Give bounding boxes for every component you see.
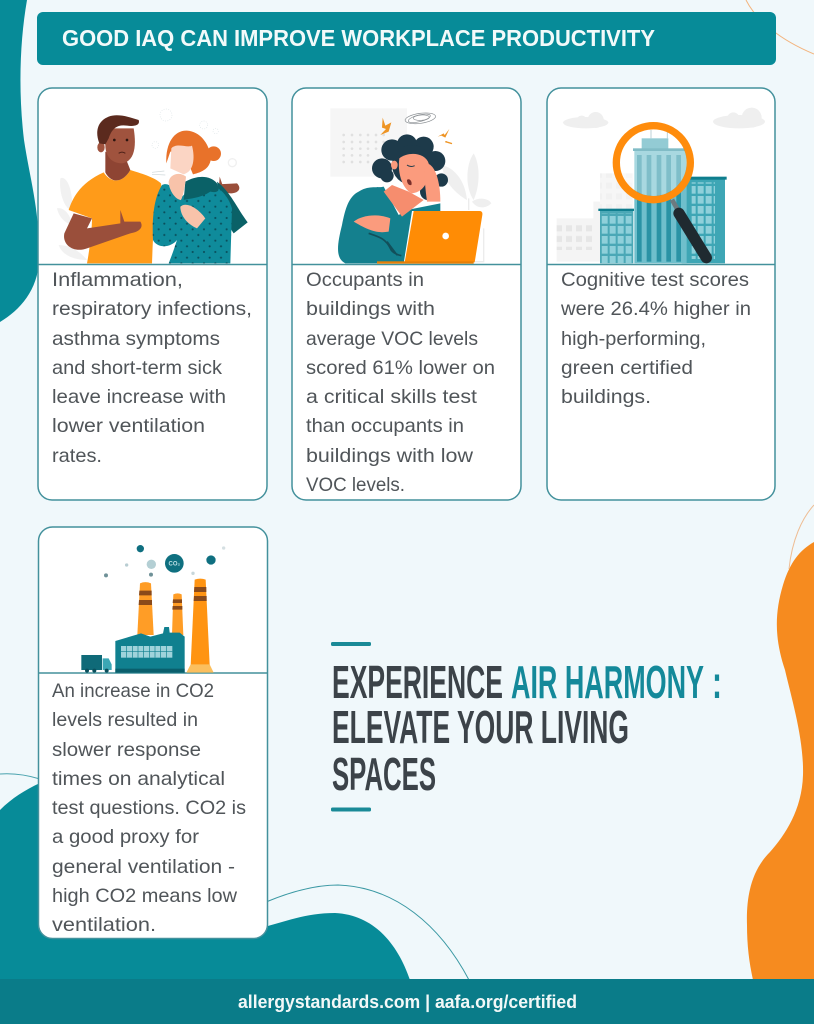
panel: VOC levels (292, 88, 521, 500)
panel: green certified buildings (547, 88, 775, 500)
text: CO2 levels: slower response (52, 739, 201, 761)
background arc: bottom left small (0, 774, 40, 779)
title banner (37, 12, 776, 65)
background blob: top left teal (0, 0, 39, 322)
text: inflammation: Inflammation, (52, 269, 183, 291)
text: VOC levels: buildings with low (306, 445, 474, 467)
icon: magnifier over buildings (557, 108, 765, 263)
text: CO2 levels: An increase in CO2 (52, 680, 214, 702)
background arc: bottom centre (266, 885, 469, 980)
text: VOC levels (306, 269, 495, 496)
icon: man comforting coughing woman (57, 109, 248, 263)
heading: experience air harmony (331, 642, 722, 812)
text: cognitive scores: green certified (561, 357, 693, 379)
heading: experience air harmony: : (712, 656, 722, 708)
text: VOC levels: VOC levels. (306, 474, 405, 496)
text: VOC levels: scored 61% lower on (306, 357, 495, 379)
text: inflammation: rates. (52, 445, 102, 467)
text: VOC levels: Occupants in (306, 269, 424, 291)
text: cognitive scores: were 26.4% higher in (560, 298, 751, 320)
icon: stressed woman at laptop (330, 108, 491, 264)
footer: allergystandards.com | aafa.org/certified (238, 992, 577, 1012)
text: CO2 levels: levels resulted in (52, 709, 198, 731)
panel: CO2 levels (38, 527, 268, 938)
text: inflammation (52, 269, 252, 467)
text: VOC levels: buildings with (306, 298, 435, 320)
title banner: GOOD IAQ CAN IMPROVE WORKPLACE PRODUCTIVITY (62, 25, 655, 51)
text: inflammation: respiratory infections, (52, 298, 252, 320)
background arc: right orange (789, 505, 814, 569)
background arc: top right orange (746, 0, 814, 54)
heading: experience air harmony: EXPERIENCE (332, 656, 503, 708)
text: CO2 levels: test questions. CO2 is (52, 797, 246, 819)
text: cognitive scores: buildings. (561, 386, 651, 408)
text: VOC levels: a critical skills test (306, 386, 478, 408)
text: VOC levels: than occupants in (306, 415, 464, 437)
text: CO2 levels: high CO2 means low (52, 885, 238, 907)
label: CO2 bubble (165, 554, 184, 573)
text: inflammation: asthma symptoms (52, 328, 220, 350)
footer (0, 979, 814, 1024)
text: CO2 levels: general ventilation - (52, 856, 235, 878)
text: inflammation: leave increase with (52, 386, 226, 408)
text: VOC levels: average VOC levels (306, 328, 478, 350)
text: CO2 levels: a good proxy for (52, 826, 200, 848)
text: CO2 levels (52, 680, 246, 936)
icon: factory emitting CO2 (81, 545, 225, 673)
label: CO2 bubble: CO₂ (169, 562, 180, 568)
text: CO2 levels: ventilation. (52, 914, 156, 936)
background blob: bottom left teal (0, 783, 410, 980)
panel: ventilation and sickness (38, 88, 267, 500)
text: cognitive scores: Cognitive test scores (561, 269, 749, 291)
background blob: right orange (747, 542, 814, 980)
text: cognitive scores: high-performing, (561, 328, 706, 350)
text: inflammation: lower ventilation (52, 415, 205, 437)
text: cognitive scores (560, 269, 751, 408)
text: inflammation: and short-term sick (52, 357, 222, 379)
heading: experience air harmony: SPACES (332, 748, 436, 800)
text: CO2 levels: times on analytical (52, 768, 225, 790)
